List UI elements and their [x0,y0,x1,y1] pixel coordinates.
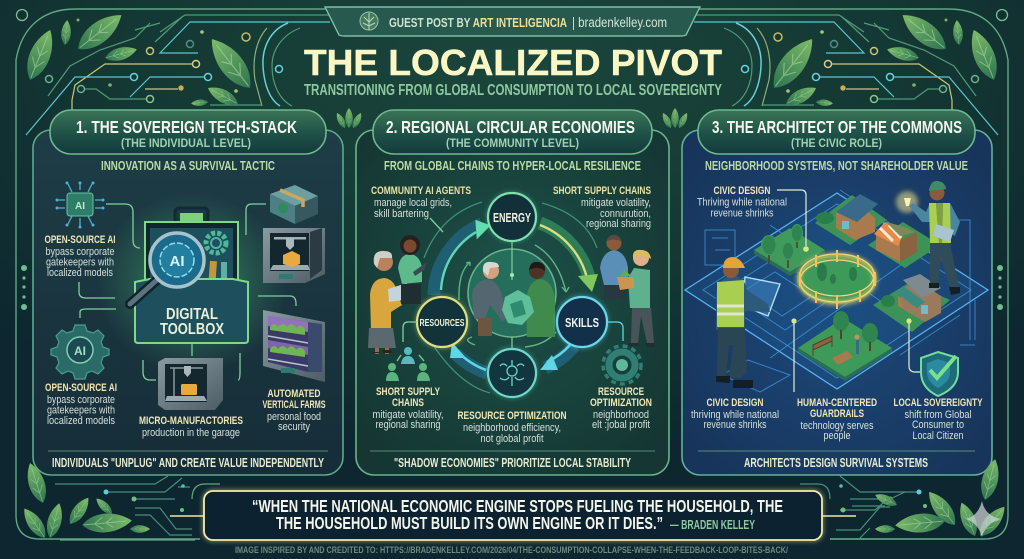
panel heading pill: (THE INDIVIDUAL LEVEL) [121,138,251,150]
label: automated vertical farms [262,388,326,433]
node: energy: ENERGY [493,210,531,225]
person: engineer with blueprint [716,257,780,388]
label: human-centered guardrails: people [824,430,850,442]
arrow: hub to resources [450,342,487,373]
fenced commons [797,250,877,309]
label: resource optimization right [590,386,652,431]
label: open-source AI bottom: localized models [47,415,115,427]
left elder [472,262,508,336]
people: man and boy sharing food [600,235,655,347]
label: civic design bottom [691,397,779,431]
icon: digital toolbox: AI [170,253,184,270]
panel footer: INDIVIDUALS "UNPLUG" AND CREATE VALUE INDEPENDENTLY [52,456,324,470]
panel heading pill: (THE COMMUNITY LEVEL) [446,138,579,150]
toolbox label: DIGITAL [166,306,218,323]
icon: digital toolbox [130,208,248,343]
label: civic design top: CIVIC DESIGN [714,185,771,197]
quote box [170,491,856,540]
shop block [868,222,940,268]
panel heading pill [698,110,975,154]
label: human-centered guardrails: GUARDRAILS [810,408,864,420]
decorative leaves between panels [334,108,690,129]
panel heading pill: 1. THE SOVEREIGN TECH-STACK [76,117,297,137]
bottom-right circuit and leaves [800,457,1010,541]
label: local sovereignty: Consumer to [912,419,964,431]
glow [97,193,287,373]
label: short supply chains bottom [372,386,444,431]
right man [518,262,555,337]
label: civic design bottom: thriving while national [691,409,779,421]
label: open-source AI top: localized models [47,267,113,279]
label: open-source AI bottom [45,382,117,427]
connector: local sovereignty [906,318,922,372]
icon: AI gear [51,325,109,379]
park block [754,224,825,276]
top banner [325,7,700,36]
tagline: INNOVATION AS A SURVIVAL TACTIC [101,158,275,173]
left side circuit and leaf decoration [16,7,330,539]
arrow: skills to hub [540,345,574,370]
label: open-source AI bottom: bypass corporate [47,394,115,406]
panel: regional circular economies [356,110,669,475]
icon: AI gear: AI [74,344,86,358]
label: civic design bottom: CIVIC DESIGN [706,397,764,409]
label: open-source AI top: bypass corporate [46,246,114,258]
label: local sovereignty: LOCAL SOVEREIGNTY [894,397,983,409]
gear in lid [206,233,226,253]
tagline: FROM GLOBAL CHAINS TO HYPER-LOCAL RESILIENCE [384,158,641,173]
panel heading pill: 2. REGIONAL CIRCULAR ECONOMIES [386,117,635,137]
label: community AI agents: COMMUNITY AI AGENTS [371,185,471,197]
arrow: energy to skills [540,223,598,292]
panel footer: ARCHITECTS DESIGN SURVIVAL SYSTEMS [744,456,928,470]
label: human-centered guardrails [797,397,877,442]
label: short supply chains bottom: CHAINS [392,397,424,409]
label: resource optimization center: not global profit [480,433,544,445]
icon: watermark star [966,501,1001,537]
label: micro-manufactories [139,415,243,439]
label: human-centered guardrails: HUMAN-CENTERED [797,397,877,409]
label: short supply chains bottom: mitigate volatility, [372,409,444,421]
right side circuit and leaf decoration [694,7,1008,539]
quote text second line: THE HOUSEHOLD MUST BUILD ITS OWN ENGINE OR IT DIES.” [276,513,663,533]
icon: 3D printer lower [158,358,223,410]
label: resource optimization right: elt :jobal profit [592,419,650,431]
label: micro-manufactories: MICRO-MANUFACTORIES [139,415,243,427]
icon: people network [386,347,430,381]
label: short supply chains top [553,185,651,230]
connector arrows [79,204,296,380]
arrow: resources to energy [434,222,488,295]
connector: civic design [777,190,809,252]
label: local sovereignty: Local Citizen [912,430,964,442]
house block [815,194,887,245]
label: local sovereignty: shift from Global [904,409,972,421]
label: resource optimization center: neighborhood efficiency, [463,422,561,434]
label: open-source AI bottom: OPEN-SOURCE AI [45,382,117,394]
label: community AI agents: skill bartering [374,208,429,220]
park with benches [798,311,892,381]
label: civic design bottom: revenue shrinks [704,419,767,431]
node: optimization hub [486,347,538,399]
center scene [468,232,556,350]
label: open-source AI top: OPEN-SOURCE AI [44,234,116,246]
quote text: “WHEN THE NATIONAL ECONOMIC ENGINE STOPS FUELING THE HOUSEHOLD, THE [252,496,783,516]
icon: vertical farm [263,310,325,382]
subtitle: TRANSITIONING FROM GLOBAL CONSUMPTION TO LOCAL SOVEREIGNTY [304,82,722,99]
panel heading pill [373,110,652,154]
panel heading pill: (THE CIVIC ROLE) [791,138,882,150]
icon: chip: AI [75,201,85,212]
connector: skills to gear [607,322,623,341]
connector: guardrails [791,318,797,392]
label: community AI agents: manage local grids, [374,197,452,209]
node: energy [486,191,538,243]
label: automated vertical farms: security [278,421,310,433]
thin outer loop [424,202,597,393]
panel footer: "SHADOW ECONOMIES" PRIORITIZE LOCAL STABILITY [394,456,631,470]
people: elder woman with tablet [368,251,407,354]
icon: chip [56,182,104,228]
panel: sovereign tech-stack [33,110,343,475]
recycling symbol [502,290,534,325]
label: open-source AI top [44,234,116,279]
label: short supply chains bottom: SHORT SUPPLY [376,386,440,398]
label: automated vertical farms: personal food [267,411,321,423]
people: woman with tablet [398,235,427,304]
label: micro-manufactories: production in the garage [142,427,240,439]
panel: architect of the commons [682,110,992,475]
label: short supply chains top: connurution, [600,208,651,220]
title: THE LOCALIZED PIVOT [304,42,722,83]
label: civic design top: revenue shrinks [710,208,774,220]
inner arrows [459,245,569,347]
label: civic design top: Thriving while national [697,196,787,208]
site name: | bradenkelley.com [572,15,667,30]
node: resources [415,295,469,349]
icon: 3D printer upper [263,228,325,283]
label: short supply chains top: mitigate volatility, [581,197,651,209]
label: community AI agents [371,185,471,220]
label: automated vertical farms: AUTOMATED [268,388,321,400]
label: open-source AI bottom: gatekeepers with [47,404,115,416]
label: automated vertical farms: VERTICAL FARMS [262,399,326,411]
attribution: — BRADEN KELLEY [670,518,755,532]
icon: optimization gear [603,346,641,384]
label: human-centered guardrails: technology serves [800,420,874,432]
label: short supply chains top: SHORT SUPPLY CHAINS [553,185,651,197]
label: short supply chains bottom: regional sharing [376,419,440,431]
node: skills [555,295,609,349]
label: civic design top [697,185,787,220]
icon: shield with check [921,352,958,396]
label: resource optimization right: RESOURCE [598,386,644,398]
node: skills: SKILLS [565,315,599,330]
icon: brain tree [360,12,378,30]
icon: parcel box [270,185,318,224]
label: resource optimization center [458,410,567,445]
label: local sovereignty [894,397,983,442]
label: resource optimization center: RESOURCE OPTIMIZATION [458,410,567,422]
node: resources: RESOURCES [420,317,464,329]
isometric blueprint map [685,190,988,392]
credit line: IMAGE INSPIRED BY AND CREDITED TO: HTTPS://BRADENKELLEY.COM/2026/04/THE-CONSUMPTION-COLLAPSE-WHEN-THE-FEEDBACK-LOOP-BITES-BACK/ [235,545,788,556]
byline: GUEST POST BY ART INTELIGENCIA [389,15,567,30]
connector: resources to people icon [403,322,417,342]
label: resource optimization right: neighborhood [593,409,649,421]
side node strips [21,265,1003,310]
person: engineer with light [896,181,960,295]
magnifier [150,233,204,287]
panel heading pill [50,110,326,154]
bottom-left circuit and leaves [19,461,220,542]
store block [873,274,950,332]
icon: digital toolbox: TOOLBOX [160,321,225,338]
label: short supply chains top: regional sharing [586,218,651,230]
label: resource optimization right: OPTIMIZATION [590,397,652,409]
label: open-source AI top: gatekeepers with [46,256,114,268]
